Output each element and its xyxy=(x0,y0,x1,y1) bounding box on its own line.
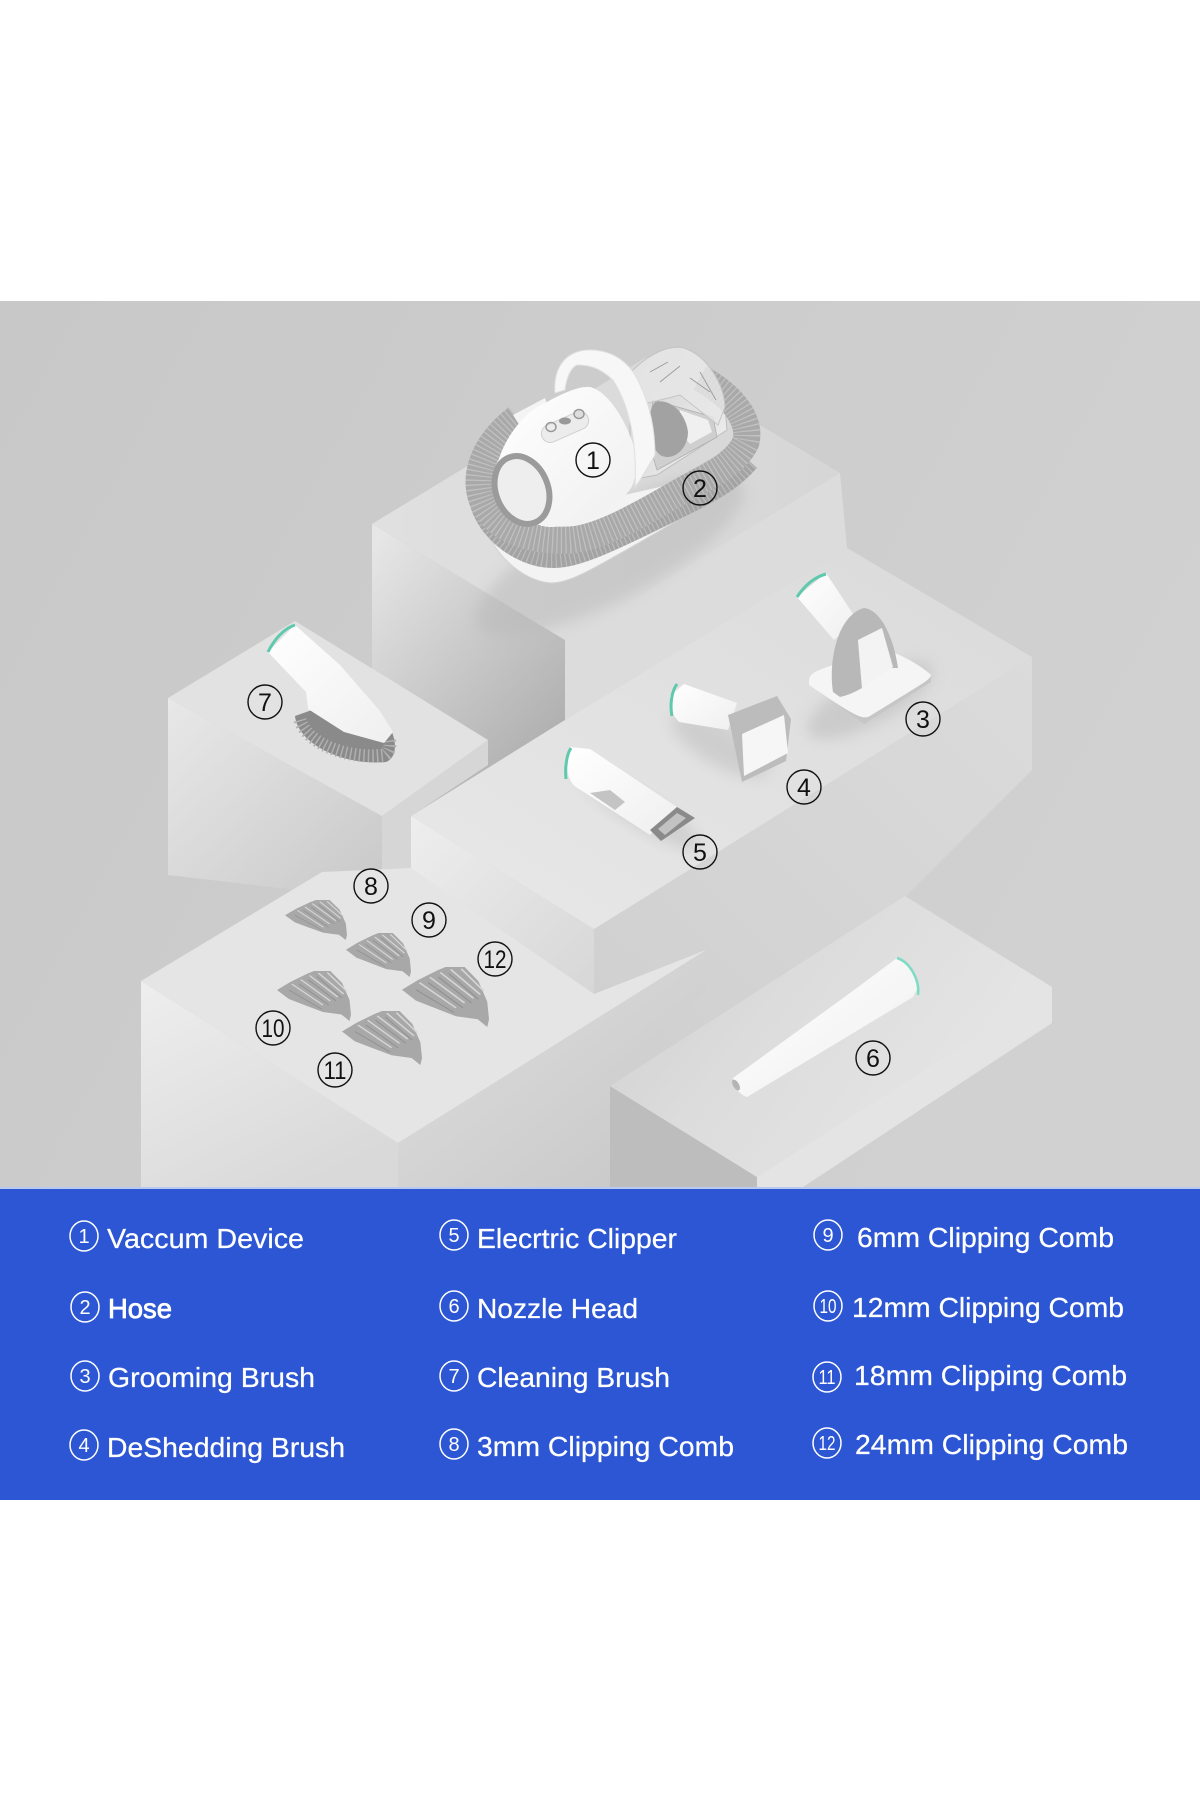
legend panel xyxy=(0,1187,1200,1500)
legend 6: 6 xyxy=(448,1296,460,1318)
legend 12: 12 xyxy=(818,1433,836,1455)
vacuum base tray xyxy=(491,468,742,583)
cup markings xyxy=(650,362,716,400)
legend 7: 7 xyxy=(448,1366,460,1388)
number 2: 2 xyxy=(693,475,707,503)
legend 3: Grooming Brush xyxy=(108,1362,315,1393)
tool: cleaning brush xyxy=(268,625,395,762)
legend 12: 24mm Clipping Comb xyxy=(855,1429,1128,1460)
number 10 xyxy=(256,1011,290,1045)
legend 9: 6mm Clipping Comb xyxy=(857,1222,1114,1253)
filter cap ring xyxy=(485,448,559,532)
number 11: 11 xyxy=(324,1057,346,1085)
legend 5: Elecrtric Clipper xyxy=(477,1223,677,1254)
number 7: 7 xyxy=(258,689,272,717)
block: cleaning brush pedestal xyxy=(168,621,488,900)
transparent cup dome over hose xyxy=(630,347,725,425)
number 9 xyxy=(412,903,446,937)
legend 9: 9 xyxy=(822,1225,834,1247)
legend 2: Hose xyxy=(108,1293,172,1324)
number 5: 5 xyxy=(693,839,707,867)
comb: 3mm xyxy=(285,900,347,940)
legend 5: 5 xyxy=(448,1225,460,1247)
vacuum device xyxy=(456,347,764,665)
legend 8: 8 xyxy=(448,1434,460,1456)
number 6: 6 xyxy=(866,1045,880,1073)
comb: 18mm xyxy=(342,1011,422,1065)
block: nozzle pedestal xyxy=(610,896,1052,1189)
number 3 xyxy=(906,702,940,736)
block: combs pedestal xyxy=(141,868,706,1189)
number 3: 3 xyxy=(916,706,930,734)
number 8: 8 xyxy=(364,873,378,901)
control panel xyxy=(539,409,591,445)
tool: deshedding brush xyxy=(662,684,791,790)
legend 8: 3mm Clipping Comb xyxy=(477,1431,734,1462)
legend 10: 10 xyxy=(820,1296,836,1318)
legend 1: Vaccum Device xyxy=(107,1223,304,1254)
background panel xyxy=(0,301,1200,1189)
number 4 xyxy=(787,770,821,804)
legend 3: 3 xyxy=(79,1366,91,1388)
number 1: 1 xyxy=(586,447,600,475)
number 9: 9 xyxy=(422,907,436,935)
hose connector xyxy=(513,398,552,434)
block: tools pedestal xyxy=(411,548,1032,1086)
number 6 xyxy=(856,1041,890,1075)
comb: 6mm xyxy=(346,933,411,977)
number 8 xyxy=(354,869,388,903)
number 12 xyxy=(478,942,512,976)
comb: 24mm xyxy=(402,967,489,1027)
block: vacuum pedestal xyxy=(372,357,847,816)
hose upper coil xyxy=(479,378,747,540)
legend 1: 1 xyxy=(78,1226,90,1248)
legend 11: 11 xyxy=(818,1367,836,1389)
legend 11: 18mm Clipping Comb xyxy=(854,1360,1127,1391)
dust cup xyxy=(630,347,727,480)
hose lower coil xyxy=(480,460,748,556)
legend 2: 2 xyxy=(79,1297,91,1319)
vacuum body xyxy=(498,387,636,527)
number 2 xyxy=(683,471,717,505)
legend 2 xyxy=(71,1292,172,1324)
number 11 xyxy=(318,1053,352,1087)
number 4: 4 xyxy=(797,774,811,802)
carry handle xyxy=(555,350,655,487)
legend 4: 4 xyxy=(78,1435,90,1457)
legend 6: Nozzle Head xyxy=(477,1293,638,1324)
comb: 12mm xyxy=(277,971,351,1021)
clipping combs xyxy=(277,900,489,1065)
legend 7: Cleaning Brush xyxy=(477,1362,670,1393)
tool: nozzle head xyxy=(730,958,918,1097)
number 7 xyxy=(248,685,282,719)
number 12: 12 xyxy=(484,946,506,974)
legend 10: 12mm Clipping Comb xyxy=(852,1292,1124,1323)
legend 4: DeShedding Brush xyxy=(107,1432,345,1463)
number 1 xyxy=(576,443,610,477)
number 5 xyxy=(683,835,717,869)
tool: electric clipper xyxy=(566,747,708,861)
number 10: 10 xyxy=(262,1015,284,1043)
tool: grooming brush xyxy=(797,573,943,754)
